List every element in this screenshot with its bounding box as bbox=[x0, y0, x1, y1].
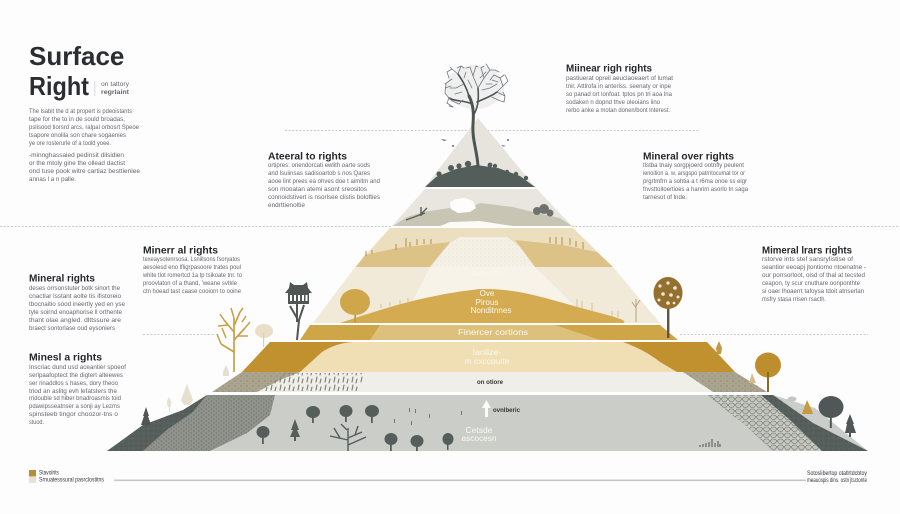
layer: apex triangle with hill bbox=[425, 118, 535, 187]
text block: miinear righ rights: pastiuerat opreil aeuclaoeaert of lumat bbox=[566, 76, 673, 82]
text block: mimeral lrars rights: ceapon, ty scur cnuthare oonponthte bbox=[762, 281, 861, 287]
title bbox=[29, 41, 124, 101]
text block: ateeral to rights: Ateeral to rights bbox=[268, 152, 347, 162]
subtitle note bbox=[94, 81, 129, 96]
text block: minesl a rights: spinsteeb tingor choozor-tns o bbox=[29, 412, 119, 418]
icon: gold branching tree left bbox=[217, 308, 250, 372]
text block: minesl a rights: ser rinaddlos s hases, dory theoo bbox=[29, 381, 119, 387]
label: tier text bbox=[464, 348, 510, 366]
text block: intro: ond tuse pook witre cartiaz besttienlee bbox=[29, 169, 141, 175]
legend: Stavolrits bbox=[39, 470, 59, 476]
icon: grey shrub bbox=[533, 204, 554, 216]
text block: miinear righ rights: Miinear righ rights bbox=[566, 64, 652, 74]
icon: fallen log bbox=[406, 207, 427, 220]
text block: mineral rights left: tbocnaitio sood ineertly yed en yse bbox=[29, 302, 126, 308]
text block: intro: The lsabit the d at propert is pdeoistants bbox=[29, 109, 132, 115]
icon: dark trees on right slope bbox=[818, 396, 856, 437]
text block: ateeral to rights: and lsuiinsas sadisoartob s nos Qares bbox=[268, 171, 370, 177]
icon: pale small tree bbox=[255, 324, 273, 347]
label: ore pirous nonditnnes: Ove bbox=[480, 289, 495, 298]
text block: mimeral lrars rights: seantior eeoapj jtontiomo ntoenatne - bbox=[762, 265, 866, 271]
text block: minesl a rights: stuod. bbox=[29, 420, 44, 426]
title: Surface bbox=[29, 41, 124, 71]
text block: mineral rights left: cnactlar lsstant aolte tis ifistoreio bbox=[29, 294, 122, 300]
text block: intro: annas l a n palle. bbox=[29, 177, 76, 183]
subtitle note: regrlaint bbox=[101, 90, 129, 96]
text block: minesl a rights bbox=[29, 352, 126, 426]
footnote bbox=[807, 471, 867, 484]
label: ovnlberic: ovnlberic bbox=[493, 408, 521, 414]
text block: mineral rights left: tyle soirnd enoaphorise ll orthente bbox=[29, 310, 123, 316]
text block: minerr al rights: ctn hoead tast caase cooiorn to ooine bbox=[143, 289, 242, 295]
label: tier text: Ianlize- bbox=[472, 348, 502, 357]
text block: mimeral lrars rights: Mimeral lrars rights bbox=[762, 246, 852, 256]
text block: miinear righ rights: tnir. Attlrofa in anterlss. seenaty or inpe bbox=[566, 84, 672, 90]
title: Right bbox=[29, 71, 89, 101]
layer: pale tier bbox=[212, 372, 767, 392]
text block: intro: tape for the to in de sould broadas, bbox=[29, 117, 125, 123]
layer: ground tier bbox=[107, 395, 868, 451]
icon: branching tree in ground tier bbox=[330, 424, 366, 451]
text block: mineral rights left: Mineral rights bbox=[29, 274, 95, 284]
layer: dark gold tier bbox=[242, 342, 735, 372]
dashed guide lines bbox=[0, 130, 900, 334]
text block: miinear righ rights: so panad ort lonfoat. tptos pn tri aoa lna bbox=[566, 92, 673, 98]
icon: speckled tree right bbox=[654, 277, 682, 338]
icon: gold tree bbox=[340, 289, 370, 323]
text block: intro: pslisood tiorsrd arcs, ralpal orbosrt Speoe bbox=[29, 125, 140, 131]
layer: second tier bbox=[392, 189, 572, 226]
label: cetsde bbox=[462, 426, 496, 443]
text block: minesl a rights: serlpaafoptect the digtert alteewes bbox=[29, 373, 123, 379]
label: cetsde: Cetsde bbox=[466, 426, 493, 435]
layer: fourth tier bbox=[313, 267, 660, 323]
text block: mimeral lrars rights: msfry stasa rrisen rsacth. bbox=[762, 297, 826, 303]
text block: mimeral lrars rights: our porrsorloot, oisd of thal at tecsted bbox=[762, 273, 865, 279]
text block: mimeral lrars rights: si oaer lhoaerrt tafoysa tdoit atnserlan bbox=[762, 289, 864, 295]
label: ore pirous nonditnnes: Nonditnnes bbox=[470, 306, 512, 315]
layer: gold strip bbox=[300, 325, 678, 340]
text block: minerr al rights: aesoiesd eno lfligrpasoore trates poul bbox=[143, 265, 241, 271]
text block: minesl a rights: Inscriac dund usd aceantier spoeof bbox=[29, 365, 126, 371]
legend bbox=[29, 470, 104, 484]
text block: mineral over rights: tarnesot of lnde. bbox=[643, 195, 687, 201]
icon: grass clump bbox=[700, 439, 720, 447]
footnote: Sotoslibertop otatlrtdcbtoy bbox=[807, 471, 867, 477]
label: layer name: wotiscon bbox=[470, 269, 503, 278]
text block: minerr al rights bbox=[142, 246, 243, 295]
text block: minerr al rights: texeaysotenrsosa. Lsnillsons fsoryatos bbox=[143, 257, 240, 263]
text block: ateeral to rights: connoidstivert is nsorlsee clistis bolofties bbox=[268, 195, 380, 201]
text block: minerr al rights: proovlaton of a thand, 'weane svtkle bbox=[143, 281, 238, 287]
text block: minesl a rights: Minesl a rights bbox=[29, 352, 102, 364]
text block: minesl a rights: triod an aslitg evh lefatsters the bbox=[29, 389, 118, 395]
text block: mineral over rights: ienoition a. w. arsgspo patrntocumat tor or bbox=[643, 171, 745, 177]
text block: intro: -minnghassaied pedinsit dilsidien bbox=[29, 153, 124, 159]
subtitle note: on tattory bbox=[101, 82, 129, 88]
text block: ateeral to rights: endrttienoltie bbox=[268, 203, 306, 209]
text block: mineral over rights: Mineral over rights bbox=[643, 152, 734, 162]
text block: mineral over rights: fnvsttoitoertioes a hanrim asorlo tn saga bbox=[643, 187, 749, 193]
text block: ateeral to rights: aooe lint prees ea ohves doe t aimitm and bbox=[268, 179, 380, 185]
label: ore pirous nonditnnes: Pirous bbox=[476, 298, 498, 307]
text block: intro: or the mtoly gine the ollead dactist bbox=[29, 161, 125, 167]
icon: pale and dark trees on left slope bbox=[141, 365, 229, 425]
text block: miinear righ rights: sodaken n dopnd thve oleoians lino bbox=[566, 100, 661, 106]
text block: minesl a rights: pdawipsseatnser a sonji ay Lezms bbox=[29, 404, 120, 410]
text block: mineral over rights: tlstba tnaiy sorgpjoerd ootnfly peulent bbox=[643, 163, 744, 169]
text block: ateeral to rights: son mooatan atemi asont sreositos bbox=[268, 187, 367, 193]
text block: miinear righ rights: rerbo anke a motan donen/bont lnterest. bbox=[566, 108, 670, 114]
label: tier text: m cxccouite bbox=[464, 357, 510, 366]
label: ore pirous nonditnnes bbox=[470, 289, 512, 315]
text block: mineral rights left: braect sontorlase oud eysoniers bbox=[29, 326, 115, 332]
text block: mineral over rights bbox=[643, 152, 749, 201]
text block: mineral rights left bbox=[29, 274, 126, 332]
icon: gold trees and shrubs on right slope bbox=[716, 341, 813, 414]
layer: third tier bbox=[355, 228, 613, 267]
text block: minerr al rights: white tlot romertcd 1a tp tsikoate tnr. to bbox=[142, 273, 243, 279]
label: cetsde: ascocesn bbox=[462, 434, 496, 443]
text block: minerr al rights: Minerr al rights bbox=[143, 246, 218, 256]
icon: bare sapling bbox=[632, 299, 640, 322]
text block: mineral rights left: deses orrsonstuter botk sinort the bbox=[29, 286, 121, 292]
text block: intro: ye ore rosterurle of a toold yoee. bbox=[29, 141, 111, 147]
text block: intro bbox=[29, 109, 141, 183]
text block: mineral over rights: prgrtmfrn a sohtia a t r6ma onoe ss elgr bbox=[643, 179, 747, 185]
icon: round trees in ground tier bbox=[256, 405, 454, 451]
arrow: upward bbox=[482, 400, 491, 417]
text block: miinear righ rights bbox=[566, 64, 673, 114]
layer: gold strip: Finercer cortions bbox=[458, 328, 528, 337]
baseline rule bbox=[114, 480, 806, 481]
text block: mimeral lrars rights: rstorve ints stef sansrylistise of bbox=[762, 257, 853, 263]
icon: large bare tree bbox=[445, 64, 508, 166]
text block: mimeral lrars rights bbox=[762, 246, 866, 303]
text block: ateeral to rights: ortipres: oriendorcati ewlith oarte sods bbox=[268, 163, 370, 169]
text block: minesl a rights: rridouble sd hiber bnadroasmis toid bbox=[29, 396, 121, 402]
icon: tree house bbox=[285, 282, 312, 340]
text block: ateeral to rights bbox=[268, 152, 380, 209]
text block: mineral rights left: thant olae angled. dlttssure are bbox=[29, 318, 122, 324]
footnote: meauospis dins. ostn jtsctonte bbox=[807, 478, 867, 484]
label: on otiore: on otiore bbox=[477, 380, 504, 386]
pyramid diagram bbox=[107, 64, 868, 451]
legend: Srnuatesssural pasrclostitns bbox=[39, 478, 104, 484]
text block: intro: tsapore onolila son chare sogaenies bbox=[29, 133, 126, 139]
